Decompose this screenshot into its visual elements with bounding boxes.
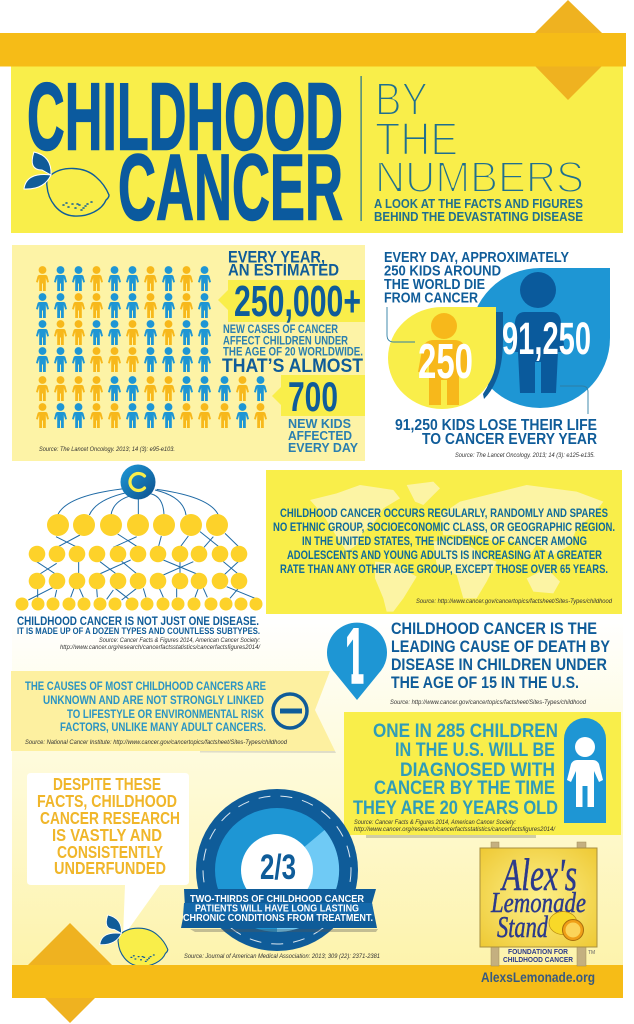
causes text: TO LIFESTYLE OR ENVIRONMENTAL RISK	[67, 708, 265, 721]
title: childhood: CHILDHOOD	[27, 64, 343, 170]
panel: 250 vs 91,250	[384, 250, 610, 459]
chart: two-thirds donut	[181, 789, 380, 960]
source: Source: The Lancet Oncology. 2013; 14 (3): e125-e135.	[455, 453, 595, 459]
background: lower section	[12, 618, 623, 965]
text: new kids affected: AFFECTED	[288, 428, 352, 443]
header diamond lower point	[535, 66, 602, 100]
orange child	[418, 313, 470, 405]
text: 91,250 kids: 91,250 KIDS LOSE THEIR LIFE	[395, 417, 597, 434]
banner	[181, 889, 378, 932]
one in 285 text: IN THE U.S. WILL BE	[395, 740, 555, 761]
source: Source: Journal of American Medical Association: 2013; 309 (22): 2371-2381	[184, 954, 380, 960]
causes text: FACTORS, UNLIKE MANY ADULT CANCERS.	[60, 721, 266, 734]
panel: one in 285	[344, 712, 621, 838]
source: Source: National Cancer Institute: http://www.cancer.gov/cancertopics/factsheet/Sites-Types/childhood	[25, 740, 288, 746]
callout: underfunded speech bubble: CONSISTENTLY	[57, 842, 163, 862]
icon: number 1 pin	[327, 622, 387, 700]
text: new cases: THE AGE OF 20 WORLDWIDE.	[223, 346, 363, 358]
text: new kids affected	[288, 416, 358, 455]
causes text: UNKNOWN AND ARE NOT STRONGLY LINKED	[43, 694, 264, 707]
one in 285 text: DIAGNOSED WITH	[400, 760, 555, 781]
heading: every day: EVERY DAY, APPROXIMATELY	[384, 250, 569, 266]
source: Source: The Lancet Oncology. 2013; 14 (3): e95-e103.	[39, 447, 175, 453]
callout: underfunded speech bubble: FACTS, CHILDHOOD	[37, 791, 177, 811]
one in 285 text	[353, 721, 558, 819]
dark crescent	[483, 312, 503, 399]
heading: every year: AN ESTIMATED	[228, 262, 339, 280]
subtitle: tagline	[374, 197, 583, 224]
dark blue child	[511, 272, 565, 393]
icon: child in pill	[564, 718, 606, 823]
text: 91,250 kids	[395, 417, 597, 448]
leading cause text: CHILDHOOD CANCER IS THE	[391, 619, 597, 638]
callout: underfunded speech bubble: IS VASTLY AND	[52, 825, 162, 845]
text: new kids affected: EVERY DAY	[288, 440, 358, 455]
subtitle: by the numbers	[375, 73, 584, 202]
logo: Alex's Lemonade Stand: Lemonade	[490, 887, 586, 919]
callout: 700: 700	[288, 373, 338, 420]
subtitle: by the numbers: NUMBERS	[375, 153, 584, 202]
top band	[0, 33, 626, 66]
source	[354, 820, 556, 833]
source	[60, 638, 261, 651]
footer diamond lower point	[45, 998, 95, 1023]
number: 250: 250	[418, 335, 473, 389]
panel: leading cause of death	[327, 622, 610, 706]
source: Source: Cancer Facts & Figures 2014, American Cancer Society:	[354, 820, 516, 826]
footer diamond upper point	[27, 923, 113, 966]
icon: minus	[273, 694, 307, 728]
causes text: THE CAUSES OF MOST CHILDHOOD CANCERS ARE	[25, 680, 266, 693]
callout: underfunded speech bubble	[27, 773, 189, 937]
source: Source: http://www.cancer.gov/cancertopics/factsheet/Sites-Types/childhood	[390, 700, 587, 706]
tree nodes	[16, 514, 262, 610]
heading: every year	[228, 248, 339, 280]
banner: PATIENTS WILL HAVE LONG LASTING	[195, 904, 359, 914]
chart: cancer type tree	[16, 464, 262, 651]
one in 285 text: THEY ARE 20 YEARS OLD	[353, 798, 558, 819]
source: Source: Cancer Facts & Figures 2014, American Cancer Society:	[99, 638, 260, 644]
statement text	[273, 507, 615, 576]
subtitle: by the numbers: THE	[375, 113, 458, 165]
logo: Alex's Lemonade Stand	[480, 842, 597, 966]
connector lines	[387, 307, 588, 414]
website url: AlexsLemonade.org	[481, 970, 595, 985]
text: new cases	[223, 324, 363, 358]
number: 2/3: 2/3	[260, 848, 296, 887]
subtitle: tagline: A LOOK AT THE FACTS AND FIGURES	[374, 197, 583, 211]
source: http://www.cancer.org/research/cancerfactsstatistics/cancerfactsfigures2014/	[354, 827, 556, 833]
leading cause text: THE AGE OF 15 IN THE U.S.	[391, 673, 579, 692]
logo lemons	[549, 912, 584, 940]
callout: underfunded speech bubble: CANCER RESEARCH	[40, 808, 180, 828]
icon: lemon with leaves	[100, 915, 168, 966]
banner: TWO-THIRDS OF CHILDHOOD CANCER	[190, 894, 365, 905]
text: not just one disease: CHILDHOOD CANCER IS NOT JUST ONE DISEASE.	[17, 614, 259, 628]
source: Source: http://www.cancer.gov/cancertopics/factsheet/Sites-Types/childhood	[416, 599, 613, 605]
icon: number 1 pin: 1	[345, 611, 365, 700]
icon: lemon	[24, 152, 109, 216]
text: not just one disease: IT IS MADE UP OF A DOZEN TYPES AND COUNTLESS SUBTYPES.	[17, 625, 260, 636]
callout: 250,000+	[218, 277, 365, 326]
logo: Alex's Lemonade Stand: CHILDHOOD CANCER	[503, 957, 573, 964]
panel: title	[11, 64, 623, 240]
callout: 250,000+: 250,000+	[234, 277, 361, 326]
icon: C root node	[120, 464, 156, 500]
blue teardrop	[470, 268, 610, 408]
pictogram of children	[36, 266, 267, 428]
panel: world map statement	[266, 470, 622, 614]
callout: underfunded speech bubble: UNDERFUNDED	[54, 858, 166, 878]
tree connectors	[28, 488, 255, 600]
text: new kids affected: NEW KIDS	[288, 416, 351, 431]
title: cancer: CANCER	[118, 134, 343, 240]
callout: underfunded speech bubble: DESPITE THESE	[53, 774, 161, 794]
banner: CHRONIC CONDITIONS FROM TREATMENT.	[183, 913, 373, 924]
title divider	[360, 76, 362, 221]
logo: Alex's Lemonade Stand: Stand	[497, 909, 548, 944]
top band diamond upper point	[535, 0, 602, 33]
world map	[310, 482, 603, 612]
one in 285 text: ONE IN 285 CHILDREN	[373, 721, 558, 742]
heading: every year: EVERY YEAR,	[228, 248, 325, 266]
yellow teardrop	[388, 307, 496, 409]
leading cause text	[391, 619, 610, 692]
text: new cases: NEW CASES OF CANCER	[223, 324, 339, 336]
logo: Alex's Lemonade Stand: Alex's	[500, 849, 577, 900]
panel: 250,000 new cases	[12, 245, 365, 461]
subtitle: by the numbers: BY	[375, 73, 428, 125]
panel: causes unknown	[11, 671, 336, 753]
logo: Alex's Lemonade Stand: TM	[588, 950, 595, 956]
text: 91,250 kids: TO CANCER EVERY YEAR	[422, 431, 597, 448]
subtitle: tagline: BEHIND THE DEVASTATING DISEASE	[374, 210, 583, 224]
heading: every day	[384, 250, 569, 306]
footer band	[12, 965, 623, 998]
heading: that's almost: THAT’S ALMOST	[222, 356, 363, 377]
heading: every day: THE WORLD DIE	[384, 277, 485, 293]
source: http://www.cancer.org/research/cancerfactsstatistics/cancerfactsfigures2014/	[60, 645, 261, 651]
logo: Alex's Lemonade Stand: FOUNDATION FOR	[508, 949, 568, 956]
causes text	[25, 680, 266, 734]
heading: every day: FROM CANCER	[384, 290, 478, 306]
heading: every day: 250 KIDS AROUND	[384, 264, 501, 280]
text: not just one disease	[17, 614, 260, 636]
one in 285 text: CANCER BY THE TIME	[374, 778, 555, 799]
text: new cases: AFFECT CHILDREN UNDER	[223, 336, 349, 348]
